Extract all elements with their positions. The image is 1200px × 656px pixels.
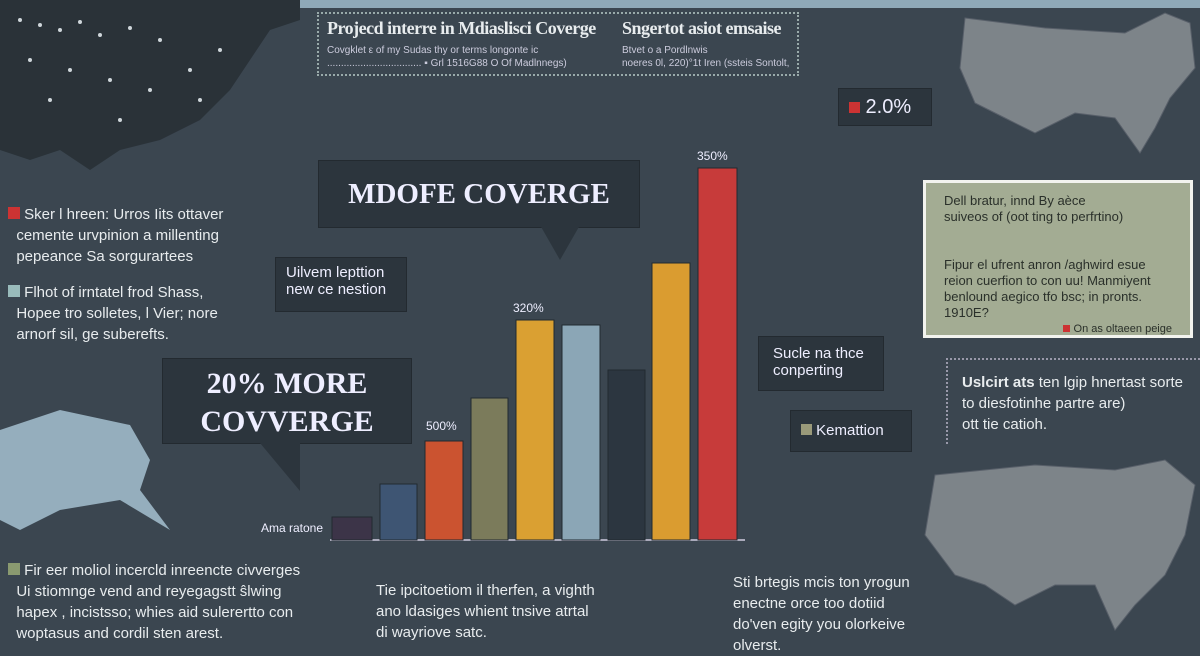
- dotted text block right: [946, 358, 1200, 444]
- callout: kemattion: Kemattion: [816, 422, 884, 439]
- subtitle left: .................................. ▪ Grl 1516G88 O Of Madlnnegs): [327, 58, 567, 69]
- title left: Projecd interre in Mdiaslisci Coverge: [327, 18, 596, 38]
- bottom text middle: ano ldasiges whient tnsive atrtal: [376, 603, 589, 620]
- bar chart: Ama ratone: [261, 521, 323, 535]
- callout: 20% more coverge: COVVERGE: [200, 405, 374, 438]
- subtitle left: [327, 45, 567, 69]
- callout: 20% more coverge: [162, 358, 412, 444]
- top band: [0, 0, 1200, 8]
- bottom text middle: Tie ipcitoetiom il therfen, a vighth: [376, 582, 595, 599]
- map: top left USA: [0, 0, 300, 170]
- note box green: [923, 180, 1193, 338]
- stat: 2.0%: [838, 88, 932, 126]
- note box green: Dell bratur, innd By aèce: [944, 193, 1086, 208]
- callout: new section: new ce nestion: [286, 281, 386, 298]
- callout: mdofe coverge: MDOFE COVERGE: [348, 178, 610, 210]
- map: bottom right: [924, 460, 1196, 631]
- callout: right: Sucle na thce: [773, 345, 864, 362]
- subtitle right: [622, 45, 789, 69]
- bottom text right: olverst.: [733, 637, 781, 654]
- bottom text right: [733, 574, 910, 654]
- title right: Sngertot asiot emsaise: [622, 18, 781, 38]
- stat: 2.0%: 2.0%: [866, 96, 911, 118]
- dotted text block right: ott tie catioh.: [962, 416, 1047, 433]
- bottom text left: Ui stiomnge vend and reyegagstt ŝlwing: [16, 583, 281, 600]
- note box green: suiveos of (oot ting to perfrtino): [944, 209, 1123, 224]
- map: top right: [960, 12, 1196, 154]
- dotted text block right: to diesfotinhe partre are): [962, 395, 1125, 412]
- bottom text left: [8, 562, 300, 642]
- callout: mdofe coverge: [318, 160, 640, 228]
- callout: new section: [275, 257, 407, 312]
- left text block 2: Flhot of irntatel frod Shass,: [24, 284, 203, 301]
- note box green: Fipur el ufrent anron /aghwird esue reion cuerfion to con uu! Manmiyent benlound aegico tfo bsc; in pronts. 1910E?: [944, 257, 1151, 320]
- callout: 20% more coverge: 20% MORE: [207, 367, 367, 400]
- callout: kemattion: [790, 410, 912, 452]
- callout: new section: Uilvem lepttion: [286, 264, 384, 281]
- subtitle right: Btvet o a Pordlnwis: [622, 45, 708, 56]
- map: Alaska: [0, 410, 170, 530]
- bottom text right: enectne orce too dotiid: [733, 595, 885, 612]
- bottom text middle: di wayriove satc.: [376, 624, 487, 641]
- bar chart: 350%: [697, 149, 728, 163]
- callout: right: [758, 336, 884, 391]
- callout: right: conperting: [773, 362, 843, 379]
- bar chart: 320%: [513, 301, 544, 315]
- bottom text middle: [376, 582, 595, 641]
- bottom text left: hapex , incistsso; whies aid sulerertto con: [16, 604, 293, 621]
- subtitle right: noeres 0l, 220)°1t Iren (ssteis Sontolt,: [622, 58, 789, 69]
- note box green: On as oltaeen peige: [1074, 323, 1172, 335]
- bottom text left: Fir eer moliol incercld inreencte civverges: [24, 562, 300, 579]
- left text block 1: cemente urvpinion a millenting: [16, 227, 219, 244]
- left text block 2: arnorf sil, ge suberefts.: [16, 326, 169, 343]
- left text block 1: [8, 206, 224, 265]
- left text block 1: pepeance Sa sorgurartees: [16, 248, 193, 265]
- subtitle left: Covgklet ε of my Sudas thy or terms longonte ic: [327, 45, 538, 56]
- header box: [317, 12, 799, 76]
- left text block 2: [8, 284, 218, 343]
- dotted text block right: Uslcirt ats ten lgip hnertast sorte: [962, 374, 1183, 391]
- bar chart: [261, 149, 745, 541]
- bottom text right: Sti brtegis mcis ton yrogun: [733, 574, 910, 591]
- bottom text left: woptasus and cordil sten arest.: [16, 625, 223, 642]
- left text block 2: Hopee tro solletes, l Vier; nore: [16, 305, 218, 322]
- bottom text right: do'ven egity you olorkeive: [733, 616, 905, 633]
- left text block 1: Sker l hreen: Urros Iits ottaver: [24, 206, 223, 223]
- bar chart: 500%: [426, 419, 457, 433]
